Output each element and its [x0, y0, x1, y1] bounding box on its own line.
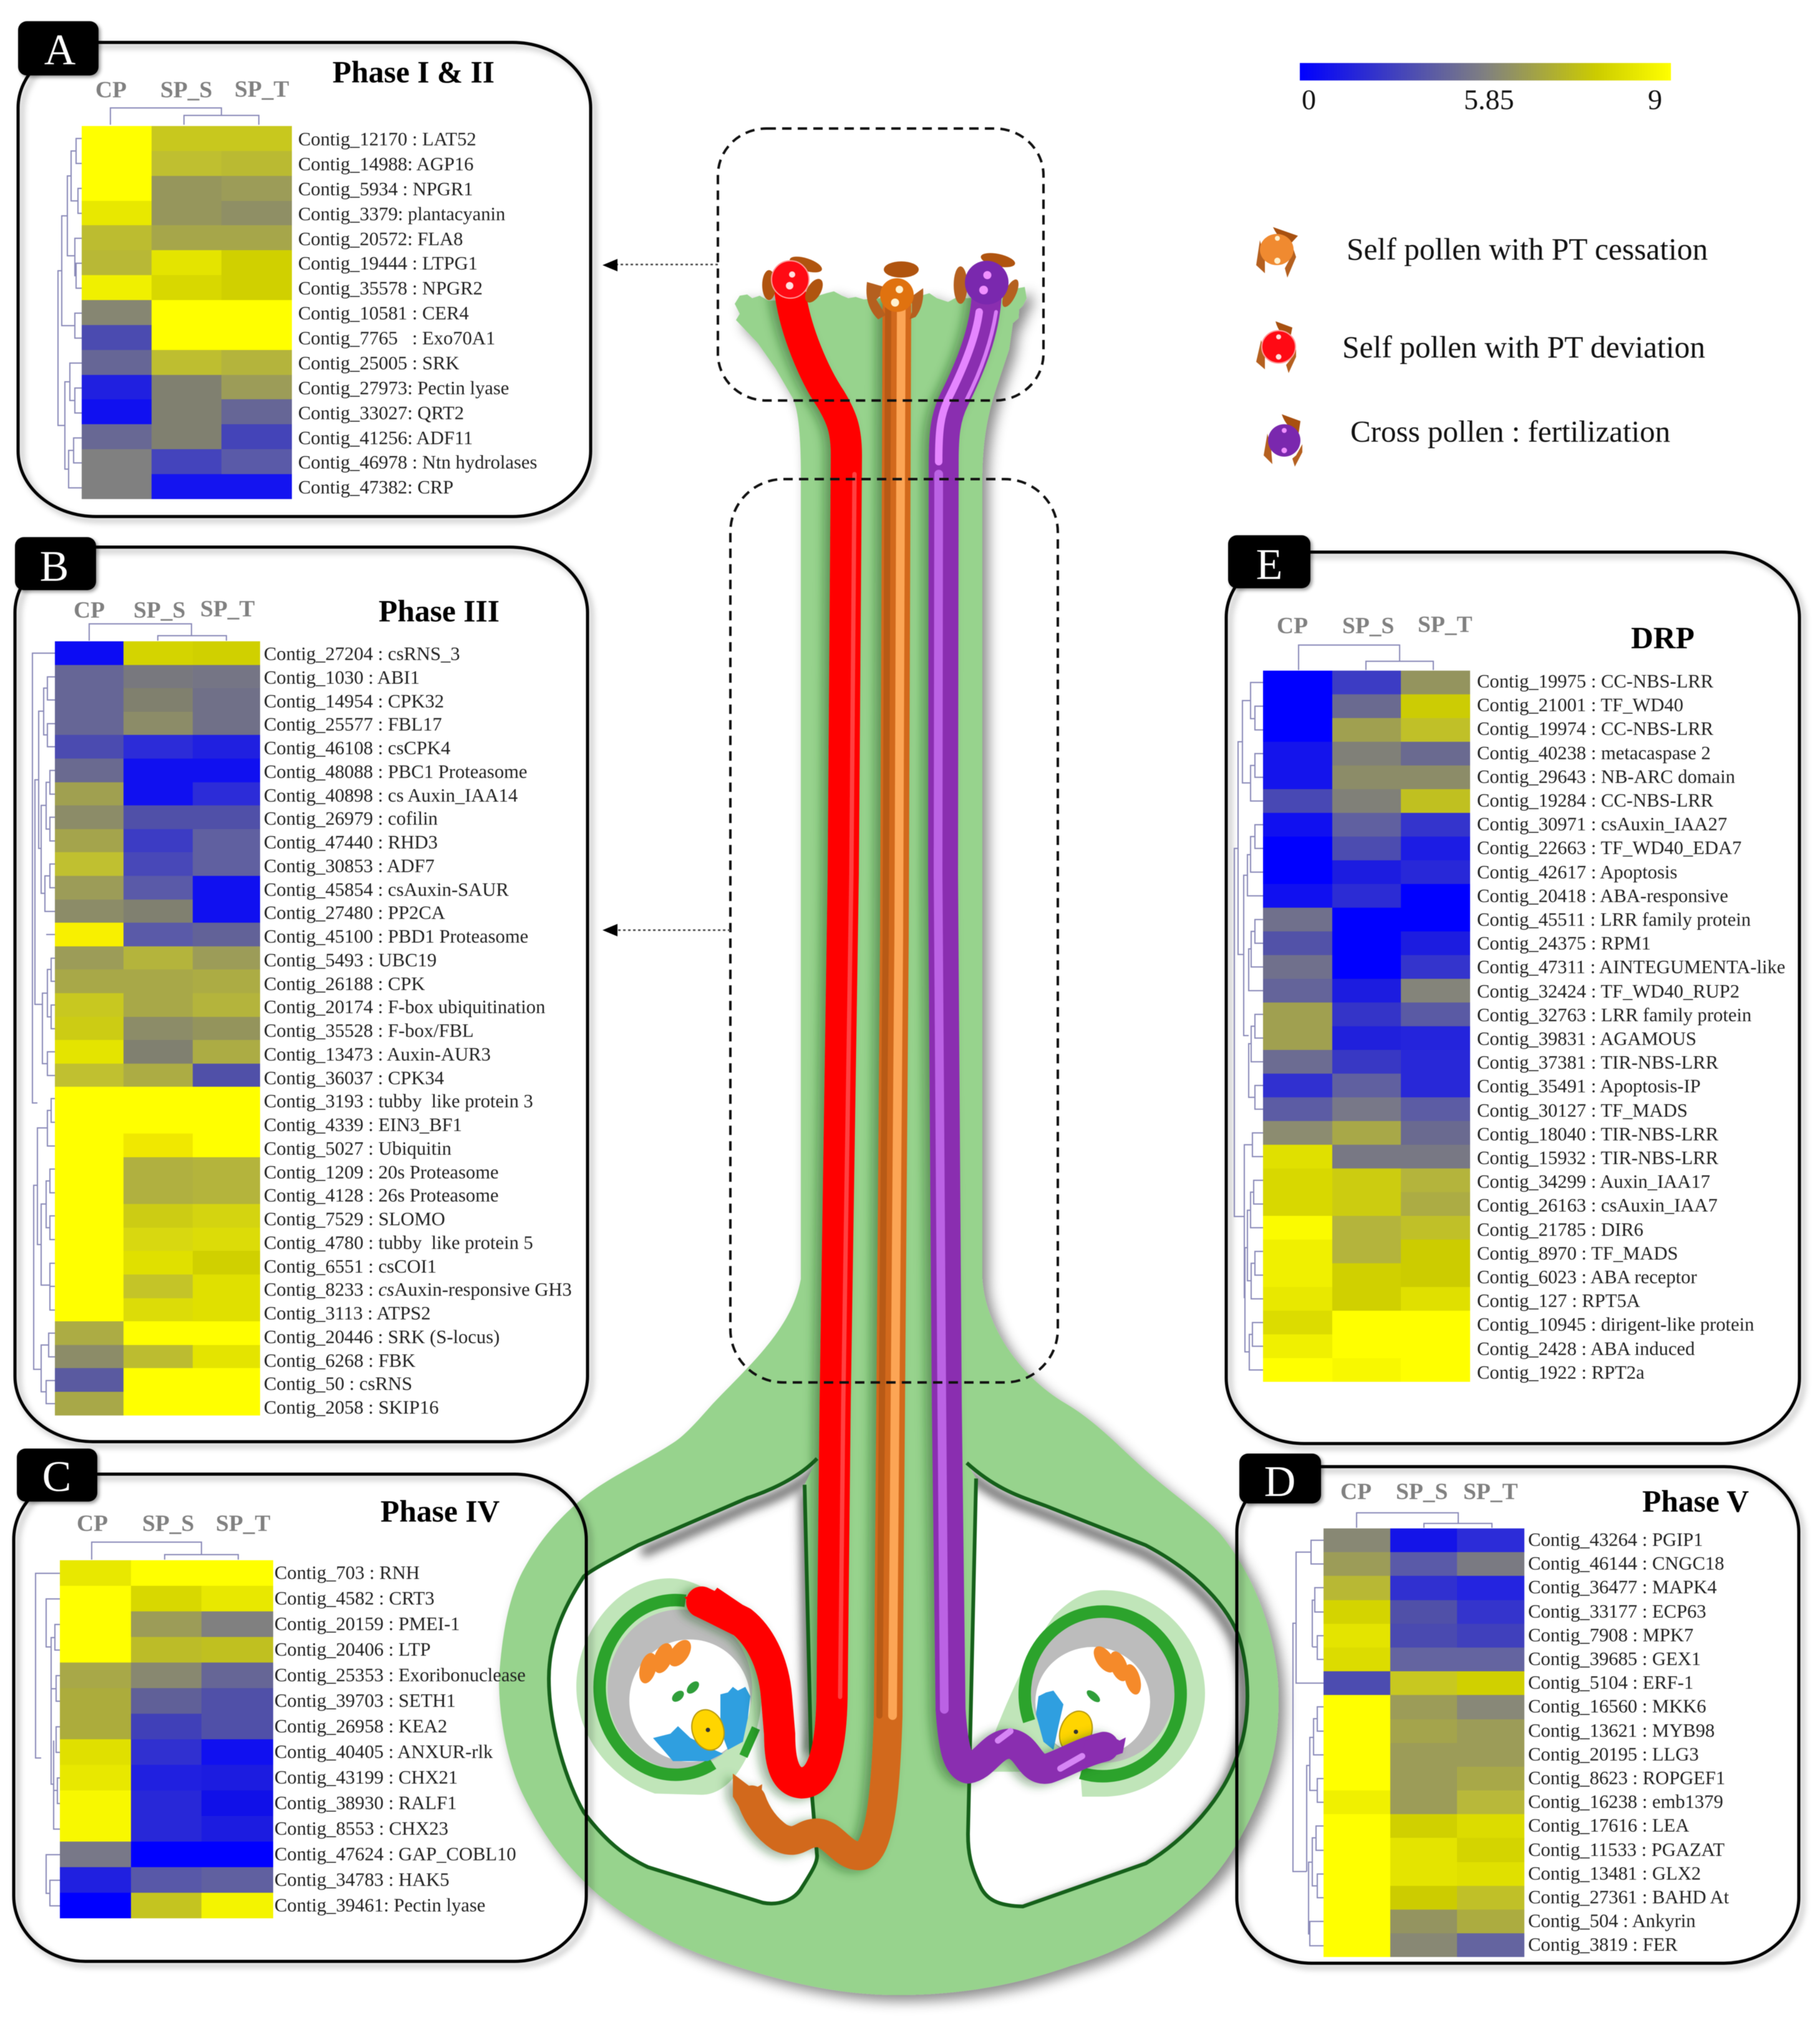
column labels: SP_T: [1463, 1479, 1518, 1505]
column labels: CP: [1340, 1479, 1372, 1505]
column labels: SP_S: [142, 1511, 194, 1537]
tab A: A: [44, 26, 76, 74]
title: Phase I & II: [332, 55, 495, 89]
tab E: [1228, 535, 1310, 589]
left dendrogram: [1234, 682, 1263, 1370]
panel A: Phase I & II: [16, 21, 600, 525]
row labels B: Contig_27204 : csRNS_3 Contig_1030 : ABI1 Contig_14954 : CPK32 Contig_25577 : FBL17 Contig_46108 : csCPK4 Contig_48088 : PBC1 Proteasome Contig_40898 : cs Auxin_IAA14 Contig_26979 : cofilin Contig_47440 : RHD3 Contig_30853 : ADF7 Contig_45854 : csAuxin-SAUR Contig_27480 : PP2CA Contig_45100 : PBD1 Proteasome Contig_5493 : UBC19 Contig_26188 : CPK Contig_20174 : F-box ubiquitination Contig_35528 : F-box/FBL Contig_13473 : Auxin-AUR3 Contig_36037 : CPK34 Contig_3193 : tubby like protein 3 Contig_4339 : EIN3_BF1 Contig_5027 : Ubiquitin Contig_1209 : 20s Proteasome Contig_4128 : 26s Proteasome Contig_7529 : SLOMO Contig_4780 : tubby like protein 5 Contig_6551 : csCOI1 Contig_8233 : csAuxin-responsive GH3 Contig_3113 : ATPS2 Contig_20446 : SRK (S-locus) Contig_6268 : FBK Contig_50 : csRNS Contig_2058 : SKIP16: [264, 643, 572, 1418]
top dendrogram: [1299, 645, 1433, 670]
panel B: Phase III: [12, 537, 596, 1451]
row labels C: Contig_703 : RNH Contig_4582 : CRT3 Contig_20159 : PMEI-1 Contig_20406 : LTP Contig_25353 : Exoribonuclease Contig_39703 : SETH1 Contig_26958 : KEA2 Contig_40405 : ANXUR-rlk Contig_43199 : CHX21 Contig_38930 : RALF1 Contig_8553 : CHX23 Contig_47624 : GAP_COBL10 Contig_34783 : HAK5 Contig_39461: Pectin lyase: [274, 1562, 526, 1916]
title: Phase V: [1642, 1484, 1749, 1518]
frame: [14, 1474, 586, 1961]
column labels: SP_S: [160, 77, 212, 103]
column labels: CP: [77, 1511, 108, 1537]
heatmap B: [54, 641, 261, 1416]
heatmap E: [1262, 670, 1471, 1382]
arrow to panel A: [603, 259, 718, 271]
colour scale bar: 0: [1302, 84, 1316, 115]
panel D: Phase V: [1235, 1453, 1808, 1973]
heatmap C: [59, 1560, 274, 1919]
dashed region: stigma: [718, 129, 1043, 401]
row labels A: Contig_12170 : LAT52 Contig_14988: AGP16 Contig_5934 : NPGR1 Contig_3379: plantacyanin Contig_20572: FLA8 Contig_19444 : LTPG1 Contig_35578 : NPGR2 Contig_10581 : CER4 Contig_7765 : Exo70A1 Contig_25005 : SRK Contig_27973: Pectin lyase Contig_33027: QRT2 Contig_41256: ADF11 Contig_46978 : Ntn hydrolases Contig_47382: CRP: [298, 129, 537, 498]
column labels: SP_T: [1418, 612, 1473, 638]
tab B: [15, 537, 96, 591]
left ovule: [576, 1578, 762, 1795]
column labels: CP: [1277, 613, 1308, 639]
orange pollen grain on stigma: [866, 261, 923, 319]
column labels: SP_T: [200, 596, 255, 622]
tab B: B: [40, 543, 69, 591]
legend: self pollen deviation: Self pollen with PT deviation: [1342, 330, 1705, 364]
right ovary cavity: [964, 1463, 1247, 1914]
frame: [1237, 1467, 1799, 1963]
left dendrogram: [58, 138, 82, 488]
panel E: DRP: [1224, 535, 1809, 1452]
legend: self pollen cessation: Self pollen with PT cessation: [1347, 232, 1708, 266]
legend: cross pollen fertilization: Cross pollen : fertilization: [1350, 414, 1670, 449]
left dendrogram: [36, 1573, 60, 1906]
heatmap D: [1323, 1528, 1525, 1958]
top dendrogram: [110, 108, 259, 125]
left ovary cavity: [549, 1459, 821, 1903]
arrow to panel B: [603, 924, 730, 936]
panel A frame, tab, title, column labels and dendrograms: [16, 21, 600, 525]
colour scale bar: 5.85: [1464, 84, 1514, 115]
tab C: [17, 1449, 97, 1502]
row labels D: Contig_43264 : PGIP1 Contig_46144 : CNGC18 Contig_36477 : MAPK4 Contig_33177 : ECP63 Contig_7908 : MPK7 Contig_39685 : GEX1 Contig_5104 : ERF-1 Contig_16560 : MKK6 Contig_13621 : MYB98 Contig_20195 : LLG3 Contig_8623 : ROPGEF1 Contig_16238 : emb1379 Contig_17616 : LEA Contig_11533 : PGAZAT Contig_13481 : GLX2 Contig_27361 : BAHD At Contig_504 : Ankyrin Contig_3819 : FER: [1528, 1529, 1729, 1955]
tab A: [18, 21, 99, 75]
left dendrogram: [1293, 1540, 1324, 1946]
purple pollen grain on stigma: [954, 250, 1022, 309]
legend: cross pollen fertilization: [1264, 414, 1670, 467]
title: DRP: [1631, 621, 1695, 655]
panel C frame, tab, title, column labels and dendrograms: [11, 1448, 595, 1970]
row labels E: Contig_19975 : CC-NBS-LRR Contig_21001 : TF_WD40 Contig_19974 : CC-NBS-LRR Contig_40238 : metacaspase 2 Contig_29643 : NB-ARC domain Contig_19284 : CC-NBS-LRR Contig_30971 : csAuxin_IAA27 Contig_22663 : TF_WD40_EDA7 Contig_42617 : Apoptosis Contig_20418 : ABA-responsive Contig_45511 : LRR family protein Contig_24375 : RPM1 Contig_47311 : AINTEGUMENTA-like Contig_32424 : TF_WD40_RUP2 Contig_32763 : LRR family protein Contig_39831 : AGAMOUS Contig_37381 : TIR-NBS-LRR Contig_35491 : Apoptosis-IP Contig_30127 : TF_MADS Contig_18040 : TIR-NBS-LRR Contig_15932 : TIR-NBS-LRR Contig_34299 : Auxin_IAA17 Contig_26163 : csAuxin_IAA7 Contig_21785 : DIR6 Contig_8970 : TF_MADS Contig_6023 : ABA receptor Contig_127 : RPT5A Contig_10945 : dirigent-like protein Contig_2428 : ABA induced Contig_1922 : RPT2a: [1477, 671, 1785, 1383]
column labels: [1340, 1479, 1518, 1505]
panel E frame, tab, title, column labels and dendrograms: [1224, 535, 1809, 1452]
legend: self pollen cessation: [1256, 227, 1708, 278]
colour scale bar: [1300, 63, 1671, 115]
stigma, style and ovary tissue: [499, 287, 1279, 1995]
tab D: [1239, 1454, 1321, 1506]
central diagram: pistil with pollen tubes: [496, 62, 1708, 2010]
column labels: [77, 1511, 271, 1537]
frame: [1226, 552, 1799, 1444]
purple pollen tube: fertilization: [938, 293, 1126, 1769]
dashed region: style: [730, 479, 1058, 1382]
orange pollen tube: cessation: [733, 306, 901, 1856]
column labels: SP_T: [216, 1511, 271, 1537]
column labels: SP_S: [1396, 1479, 1448, 1505]
frame: [18, 42, 591, 517]
legend: self pollen deviation: [1256, 321, 1705, 373]
column labels: CP: [74, 598, 105, 623]
column labels: [74, 596, 255, 623]
panel C: Phase IV: [11, 1448, 595, 1970]
red pollen tube: deviation: [684, 293, 854, 1783]
tab C: C: [42, 1453, 71, 1501]
panel D frame, tab, title, column labels and dendrograms: [1235, 1453, 1808, 1973]
heatmap A: [81, 125, 293, 500]
panel B frame, tab, title, column labels and dendrograms: [12, 537, 596, 1451]
column labels: SP_S: [133, 598, 185, 623]
column labels: SP_T: [235, 77, 289, 102]
column labels: [95, 77, 289, 103]
column labels: CP: [95, 77, 127, 103]
title: Phase III: [379, 594, 500, 628]
column labels: SP_S: [1342, 613, 1394, 639]
colour scale bar: 9: [1648, 84, 1662, 115]
right ovule: [980, 1590, 1205, 1797]
tab D: D: [1264, 1458, 1295, 1506]
left dendrogram: [32, 653, 55, 1404]
top dendrogram: [89, 624, 226, 641]
red pollen grain on stigma: [762, 253, 826, 306]
frame: [15, 547, 588, 1442]
top dendrogram: [1357, 1513, 1492, 1528]
top dendrogram: [92, 1542, 238, 1560]
column labels: [1277, 612, 1473, 639]
title: Phase IV: [380, 1494, 500, 1528]
tab E: E: [1256, 541, 1282, 589]
